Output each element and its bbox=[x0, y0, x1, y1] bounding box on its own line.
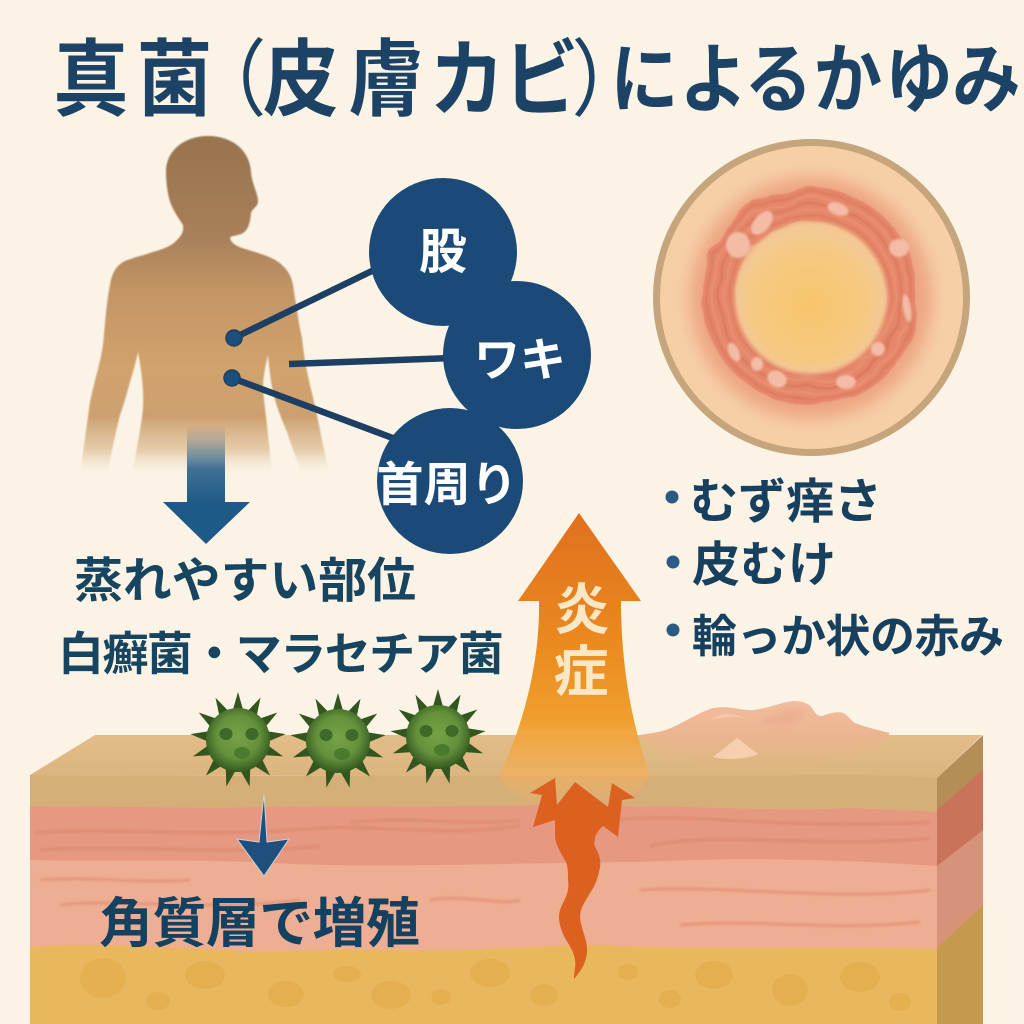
site: 股 bbox=[369, 178, 517, 326]
symptom: ring redness: 輪っか状の赤み bbox=[692, 611, 1004, 662]
panel: skin cross-section bbox=[30, 701, 983, 1024]
light pink layer bbox=[30, 859, 937, 965]
connector dots bbox=[224, 330, 242, 386]
tissue streaks bbox=[35, 818, 930, 926]
fat globules bbox=[80, 958, 911, 1011]
pale centre bbox=[735, 222, 887, 374]
right side face bbox=[937, 735, 983, 1024]
title: によるかゆみ bbox=[610, 39, 1021, 123]
site: ワキ: ワキ bbox=[474, 334, 566, 386]
title: カビ bbox=[429, 33, 579, 127]
site: 股: 股 bbox=[419, 226, 467, 279]
label: inflammation: 炎 bbox=[554, 579, 610, 641]
connector lines bbox=[232, 268, 452, 440]
fat layer bbox=[30, 945, 937, 1024]
germ 2 bbox=[290, 693, 386, 789]
pale pustules bbox=[725, 200, 913, 391]
human silhouette bbox=[80, 136, 330, 478]
text: symptoms list bbox=[666, 476, 1004, 662]
skin disc bbox=[656, 142, 966, 452]
flame: inflammation source bbox=[530, 778, 635, 979]
site: 首周り bbox=[376, 408, 523, 554]
title: 真菌 bbox=[53, 33, 212, 127]
germ 1 bbox=[190, 692, 286, 788]
red ring haze bbox=[716, 203, 906, 393]
panel: body silhouette with affected sites bbox=[80, 136, 591, 554]
arrow: down from body bbox=[163, 425, 250, 544]
title: 皮膚 bbox=[263, 33, 424, 127]
stratum corneum front bbox=[30, 775, 937, 812]
label: inflammation bbox=[553, 579, 610, 703]
germ 3 bbox=[390, 689, 486, 785]
arrow: fungus moves into skin bbox=[237, 794, 289, 876]
symptom: peeling: 皮むけ bbox=[692, 539, 836, 592]
red ring bbox=[707, 193, 913, 399]
pink layer bbox=[30, 805, 937, 868]
rash bump bbox=[640, 701, 890, 765]
title: ） bbox=[572, 33, 647, 127]
arrow: inflammation rising bbox=[500, 513, 650, 805]
heading: damp areas: 蒸れやすい部位 bbox=[74, 555, 416, 608]
panel: ringworm lesion bbox=[656, 142, 966, 452]
bullet dots bbox=[666, 490, 680, 636]
label: inflammation: 症 bbox=[553, 641, 609, 703]
text: fungus names: 白癬菌・マラセチア菌 bbox=[58, 628, 504, 680]
fungus: three germs bbox=[190, 689, 486, 789]
text: proliferates in stratum corneum: 角質層で増殖 bbox=[99, 894, 420, 954]
symptom: itch: むず痒さ bbox=[690, 476, 882, 529]
skin top surface bbox=[30, 735, 982, 778]
site: ワキ bbox=[443, 281, 591, 429]
site: 首周り: 首周り bbox=[376, 458, 518, 511]
title: （ bbox=[191, 33, 266, 127]
